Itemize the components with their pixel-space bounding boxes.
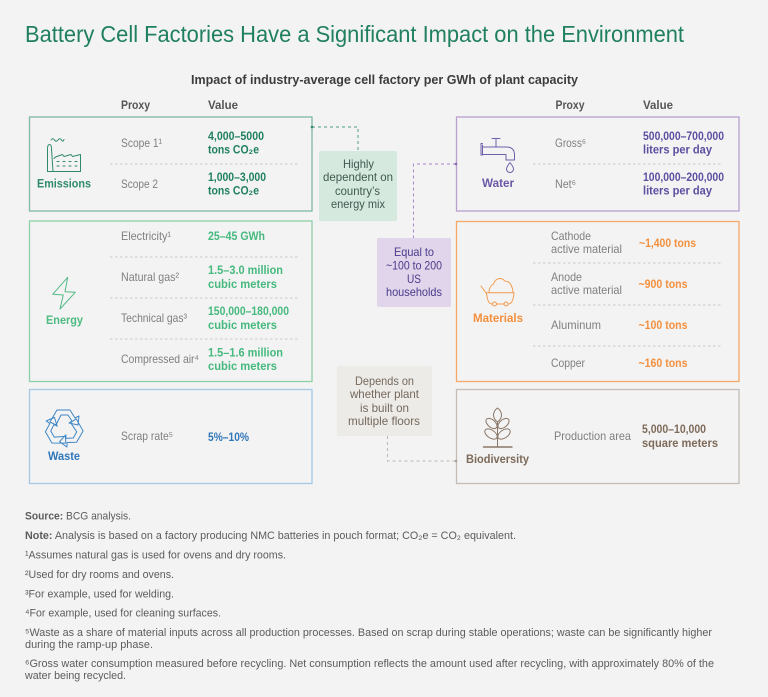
row: anode: active material — [551, 283, 622, 297]
panel: energy — [30, 221, 312, 382]
footnotes — [24, 510, 714, 682]
row: anode — [551, 270, 688, 297]
row: scope 1: 4,000–5000 — [208, 129, 264, 143]
row: production area: 5,000–10,000 — [642, 422, 706, 436]
row: production area: Production area — [554, 429, 631, 443]
callout: energy mix: Highly — [343, 157, 374, 171]
row: technical gas: cubic meters — [208, 318, 277, 332]
footnotes: water being recycled. — [24, 670, 126, 682]
title: Battery Cell Factories Have a Significant Impact on the Environment — [25, 21, 684, 47]
row: net: 100,000–200,000 — [643, 170, 724, 184]
row: electricity: Electricity¹ — [121, 229, 171, 243]
callout: households: Equal to — [394, 245, 434, 259]
row: technical gas — [121, 304, 289, 332]
subtitle: Impact of industry-average cell factory per GWh of plant capacity — [191, 72, 579, 87]
icon: lightning bolt — [53, 277, 75, 309]
footnotes: ²Used for dry rooms and ovens. — [25, 569, 174, 581]
row: copper — [551, 356, 688, 370]
row: gross: 500,000–700,000 — [643, 129, 724, 143]
callout: energy mix — [319, 151, 397, 221]
row: net — [555, 170, 724, 198]
row: aluminum: ~100 tons — [638, 318, 688, 332]
row: aluminum: Aluminum — [551, 318, 601, 332]
row: technical gas: Technical gas³ — [121, 311, 187, 325]
callout: households — [377, 238, 451, 307]
left column headers: Proxy — [121, 98, 150, 112]
row: natural gas: cubic meters — [208, 277, 277, 291]
row: scope 1 — [121, 129, 264, 156]
left column headers: Value — [208, 98, 238, 112]
left column headers — [121, 98, 238, 112]
footnotes: ⁵Waste as a share of material inputs across all production processes. Based on scrap during stable operations; waste can be significantly higher — [25, 627, 712, 639]
row: electricity — [121, 229, 265, 243]
row: copper: ~160 tons — [638, 356, 688, 370]
row: scope 2: Scope 2 — [121, 177, 158, 191]
row: gross: Gross⁶ — [555, 136, 586, 150]
footnotes: Source: BCG analysis. — [25, 510, 131, 522]
callout: households: households — [386, 285, 442, 299]
panel: water — [456, 117, 739, 211]
icon: mining cart — [481, 278, 514, 306]
icon: factory — [48, 139, 80, 172]
footnotes: ⁴For example, used for cleaning surfaces. — [25, 608, 221, 620]
row: natural gas — [121, 263, 283, 291]
row: scrap rate: Scrap rate⁵ — [121, 429, 173, 443]
label: water: Water — [482, 176, 514, 190]
row: net: liters per day — [643, 184, 712, 198]
callout: energy mix: dependent on — [323, 170, 393, 184]
footnotes: Note: Analysis is based on a factory producing NMC batteries in pouch format; CO₂e = CO₂ equivalent. — [25, 530, 516, 542]
callout: households: ~100 to 200 — [386, 258, 442, 272]
connector: water to note — [414, 163, 457, 238]
row: scope 1: Scope 1¹ — [121, 136, 162, 150]
row: cathode: active material — [551, 242, 622, 256]
row: production area: square meters — [642, 436, 718, 450]
row: technical gas: 150,000–180,000 — [208, 304, 289, 318]
callout: multiple floors — [337, 366, 432, 436]
footnotes: ¹Assumes natural gas is used for ovens and dry rooms. — [25, 550, 286, 562]
panel: biodiversity — [456, 390, 739, 484]
row: scrap rate: 5%–10% — [208, 430, 249, 444]
label: emissions: Emissions — [37, 176, 91, 190]
callout: multiple floors: multiple floors — [348, 414, 420, 428]
row: scope 2 — [121, 170, 266, 198]
row: compressed air: Compressed air⁴ — [121, 352, 199, 366]
panel: materials — [456, 222, 739, 382]
callout: energy mix: energy mix — [331, 197, 385, 211]
icon: recycling arrows — [41, 410, 87, 450]
callout: multiple floors: whether plant — [349, 387, 420, 401]
row: gross — [555, 129, 724, 156]
callout: multiple floors: Depends on — [355, 374, 414, 388]
row: scrap rate — [121, 429, 249, 444]
right column headers: Value — [643, 98, 673, 112]
row: scope 2: tons CO₂e — [208, 184, 259, 198]
row: scope 2: 1,000–3,000 — [208, 170, 266, 184]
row: natural gas: Natural gas² — [121, 270, 179, 284]
connector: emissions to note — [311, 126, 358, 151]
right column headers: Proxy — [556, 98, 585, 112]
panel: emissions — [30, 117, 312, 211]
row: natural gas: 1.5–3.0 million — [208, 263, 283, 277]
label: biodiversity: Biodiversity — [466, 452, 529, 466]
callout: multiple floors: is built on — [360, 401, 409, 415]
panel: waste — [30, 390, 312, 484]
callout: households: US — [407, 272, 421, 286]
row: cathode: Cathode — [551, 229, 591, 243]
row: compressed air — [121, 346, 283, 373]
footnotes: during the ramp-up phase. — [25, 639, 153, 651]
row: copper: Copper — [551, 356, 585, 370]
row: net: Net⁶ — [555, 177, 576, 191]
footnotes: ³For example, used for welding. — [25, 588, 174, 600]
row: anode: ~900 tons — [638, 277, 688, 291]
row: cathode: ~1,400 tons — [639, 236, 696, 250]
row: aluminum — [551, 318, 688, 332]
label: waste: Waste — [48, 449, 80, 463]
icon: water tap — [481, 138, 514, 173]
label: materials: Materials — [473, 311, 523, 325]
callout: energy mix: country’s — [335, 184, 380, 198]
row: gross: liters per day — [643, 142, 712, 156]
row: compressed air: 1.5–1.6 million — [208, 346, 283, 360]
row: electricity: 25–45 GWh — [208, 229, 265, 243]
row: production area — [554, 422, 718, 450]
row: scope 1: tons CO₂e — [208, 142, 259, 156]
right column headers — [556, 98, 673, 112]
row: anode: Anode — [551, 270, 582, 284]
row: compressed air: cubic meters — [208, 359, 277, 373]
icon: plant — [483, 408, 512, 447]
footnotes: ⁶Gross water consumption measured before recycling. Net consumption reflects the amount used after recycling, with approximately 80% of the — [25, 658, 714, 670]
label: energy: Energy — [46, 313, 83, 327]
row: cathode — [551, 229, 696, 256]
connector: biodiversity to note — [388, 436, 457, 462]
